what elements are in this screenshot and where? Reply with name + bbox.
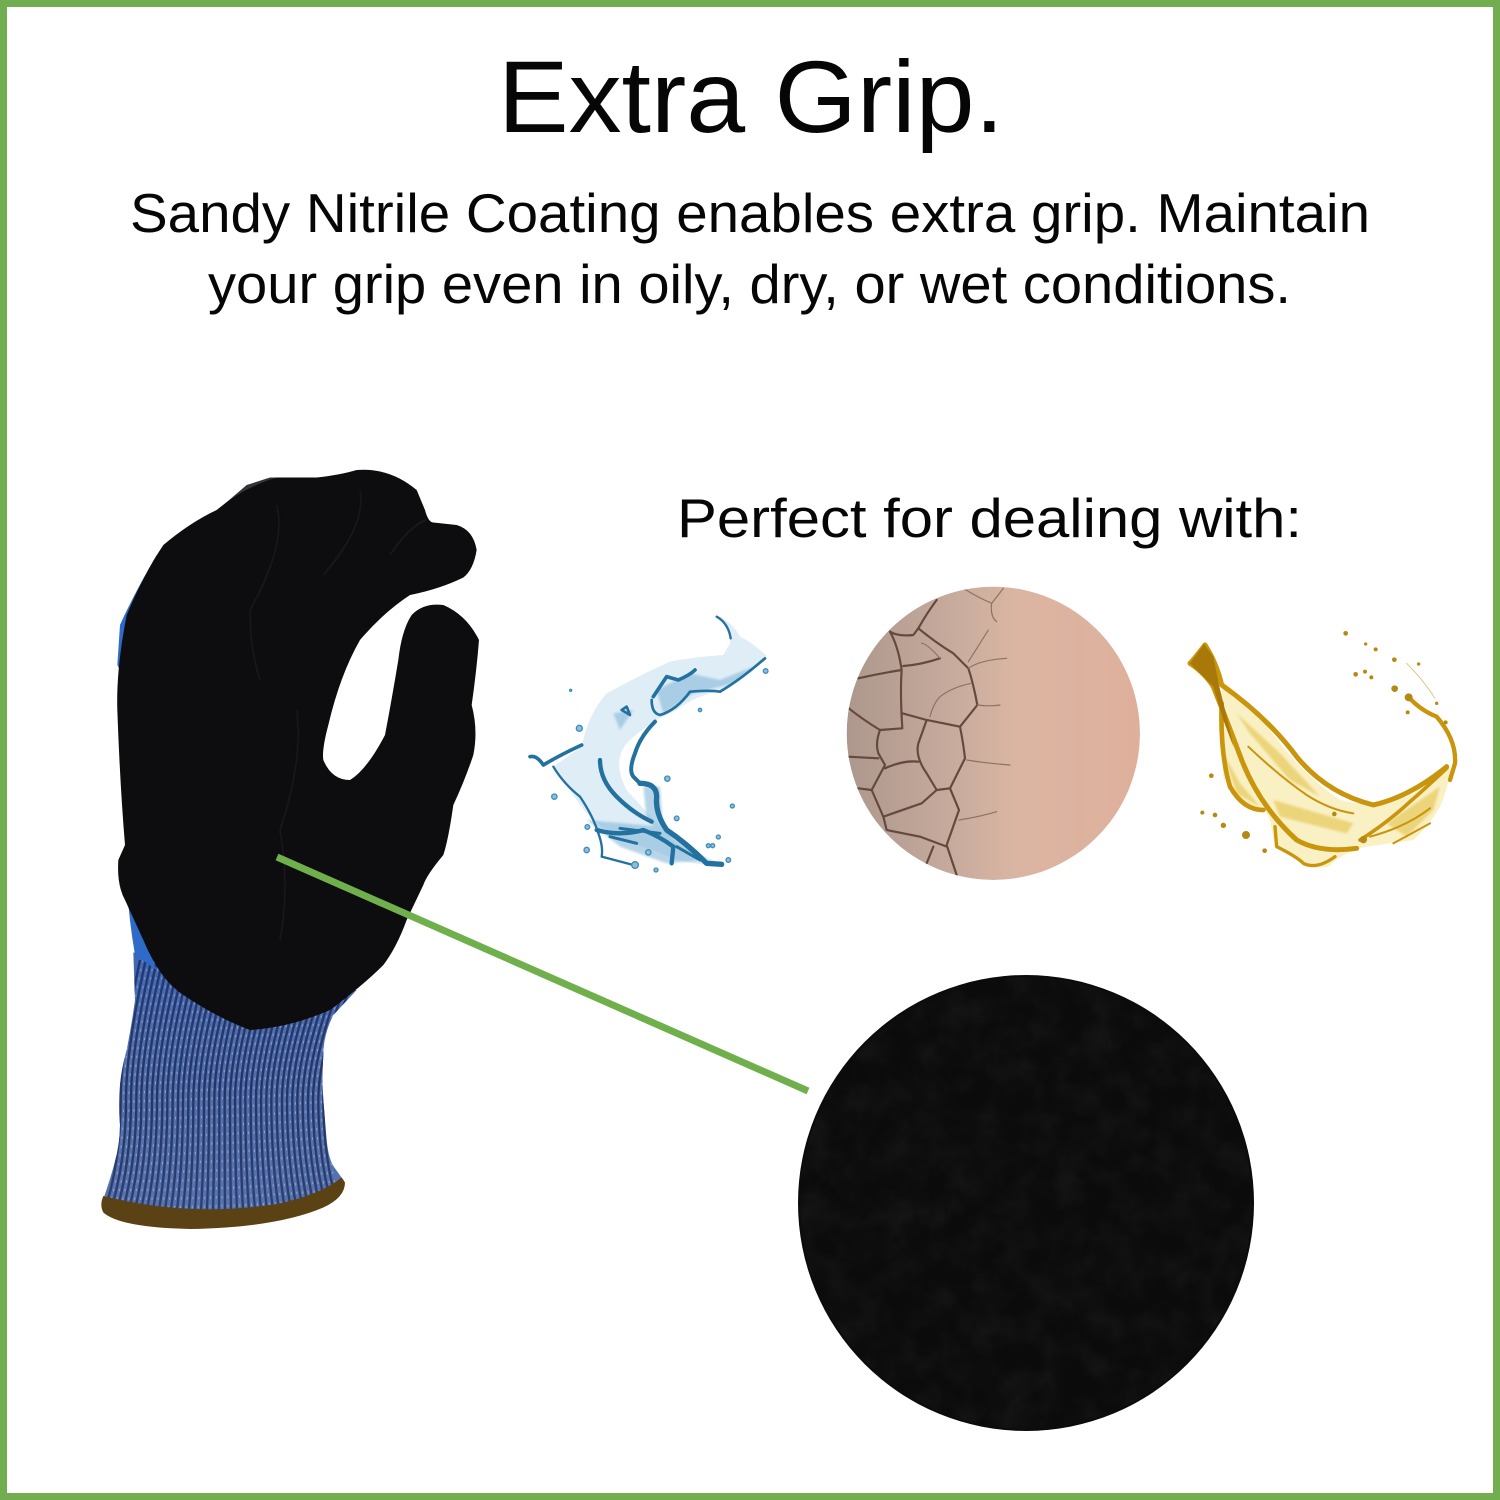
oil body <box>1221 680 1450 867</box>
water body <box>553 615 767 865</box>
water mid tones <box>587 667 753 863</box>
intro text: your grip even in oily, dry, or wet conditions. <box>208 253 1291 315</box>
water droplets <box>552 669 768 872</box>
oil droplets <box>1200 631 1448 853</box>
skin base <box>847 587 1140 880</box>
water dark streaks <box>530 617 765 865</box>
glove back blue strip <box>117 540 180 680</box>
dry cracked skin circle <box>847 587 1140 880</box>
oil dark accents <box>1190 644 1233 747</box>
glove cuff hem <box>101 1178 345 1229</box>
oil mid gold tones <box>1223 713 1440 837</box>
intro text: Sandy Nitrile Coating enables extra grip. Maintain <box>130 182 1370 244</box>
oil golden streaks <box>1190 645 1455 866</box>
callout pointer line <box>277 857 808 1091</box>
glove finger folds <box>250 490 427 940</box>
glove knuckle dots <box>223 478 310 510</box>
crack lines <box>847 588 1010 875</box>
subheading: Perfect for dealing with: <box>677 487 1302 549</box>
glove photo illustration <box>100 470 479 1229</box>
water splash image <box>530 615 768 872</box>
glove side blue strip <box>126 868 157 970</box>
oil splash image <box>1190 631 1455 867</box>
sandy nitrile texture close-up <box>798 975 1254 1431</box>
glove sandy nitrile palm <box>117 470 479 1030</box>
glove knit cuff <box>104 952 356 1210</box>
intro text <box>130 182 1370 315</box>
title: Extra Grip. <box>498 40 1004 154</box>
